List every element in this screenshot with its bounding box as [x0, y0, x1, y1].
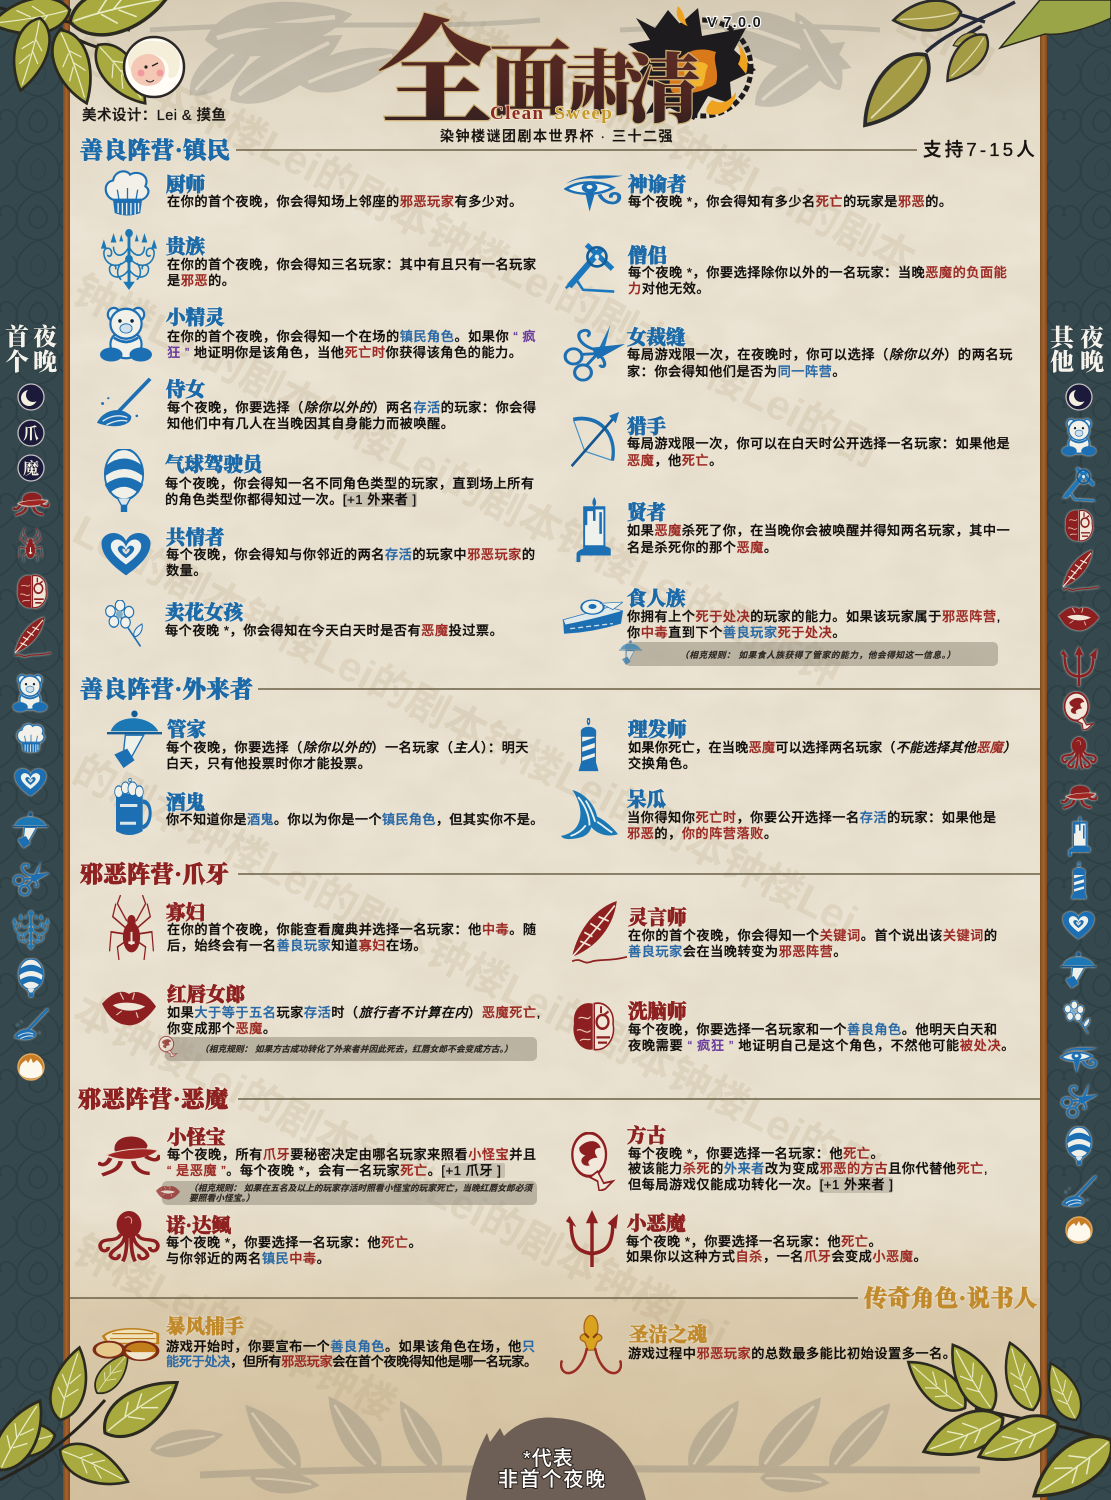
- title characters: 清: [625, 49, 701, 133]
- icon: sage: [1069, 816, 1090, 856]
- icon: seamstress: [14, 861, 50, 895]
- role: balloonist: 每个夜晚，你会得知一名不同角色类型的玩家，直到场上所有: [165, 475, 535, 491]
- section heading: townsfolk: 善良阵营·镇民: [80, 137, 230, 163]
- watermark: 的剧本钟楼Lei的剧本钟楼Lei的剧本钟楼Lei的剧: [66, 26, 886, 475]
- label: first night: 夜: [33, 323, 57, 351]
- label: other nights: 晚: [1080, 349, 1104, 376]
- label: first night: [5, 323, 57, 376]
- role: harpy: 灵言师: [628, 906, 687, 929]
- role: cannibal: 食人族: [627, 588, 686, 610]
- role: monk: 僧侣: [628, 244, 667, 267]
- icon: noble: [13, 911, 49, 950]
- emblem: thorned ring with flames: [628, 6, 756, 120]
- role: oracle: 神谕者: [628, 173, 687, 196]
- role: maid: 侍女: [166, 378, 207, 401]
- icon: monk: [1063, 468, 1095, 501]
- watermark: 钟楼Lei的剧本钟楼Lei的剧本钟楼Lei的剧本钟: [66, 266, 848, 696]
- role: drunk: 酒鬼: [166, 791, 206, 814]
- icon: oracle: [1061, 1048, 1098, 1073]
- credit text: 美术设计：Lei & 摸鱼: [82, 106, 226, 124]
- icon: imp: [1061, 646, 1097, 686]
- role: harpy: 善良玩家会在当晚转变为邪恶阵营。: [628, 943, 847, 959]
- panel: minions right column: [572, 901, 1015, 1053]
- role: recluse: [561, 789, 997, 841]
- role: spirit of ivory: 游戏过程中邪恶玩家的总数最多能比初始设置多一名。: [628, 1345, 956, 1361]
- icon: maid: [1062, 1176, 1096, 1207]
- role: storm catcher: [94, 1315, 537, 1369]
- section heading: legendary and storyteller: 传奇角色·说书人: [864, 1285, 1037, 1311]
- role: fang gu: 但每局游戏仅能成功转化一次。[+1 外来者 ]: [628, 1176, 893, 1192]
- other nights order strip: [1050, 324, 1104, 1243]
- role: drunk: [115, 778, 544, 835]
- label: first night: 首: [5, 324, 29, 351]
- role: scarlet woman: 你变成那个恶魔。: [167, 1020, 276, 1036]
- ghost foliage: bottom: [147, 1387, 980, 1497]
- footer note: *代表: [523, 1447, 574, 1470]
- panel: outsiders right column: [561, 718, 1016, 841]
- icon: butler: [13, 812, 48, 848]
- role: fang gu: 每个夜晚 *，你要选择一名玩家：他死亡。: [628, 1145, 884, 1161]
- role: barber: 如果你死亡，在当晚恶魔可以选择两名玩家（不能选择其他恶魔）: [628, 739, 1016, 755]
- icon: empath: [15, 769, 46, 796]
- role: lil monsta: [98, 1126, 537, 1178]
- icon: demon info: 魔: [23, 456, 39, 479]
- role: scarlet woman: 如果大于等于五名玩家存活时（旅行者不计算在内）恶魔死亡,: [167, 1004, 541, 1020]
- label: first night: 晚: [33, 349, 57, 376]
- role: empath: 共情者: [166, 526, 225, 549]
- role: noble: 贵族: [166, 235, 206, 258]
- icon: dusk: [1066, 384, 1092, 410]
- role: cannibal: 你拥有上个死于处决的玩家的能力。如果该玩家属于邪恶阵营,: [627, 608, 1001, 624]
- icon: widow: [19, 528, 42, 562]
- role: imp: 小恶魔: [627, 1212, 686, 1235]
- role: balloonist: 气球驾驶员: [165, 453, 265, 476]
- role: monk: 力对他无效。: [628, 280, 710, 296]
- leaves: bottom left: [0, 1343, 188, 1496]
- ghost foliage: top: [150, 0, 880, 121]
- player count: 支持7-15人: [923, 139, 1038, 160]
- role: lil monsta: “ 是恶魔 ”。每个夜晚 *，会有一名玩家死亡。[+1 爪牙 ]: [167, 1162, 501, 1178]
- role: widow: [110, 895, 537, 960]
- role: empath: 每个夜晚，你会得知与你邻近的两名存活的玩家中邪恶玩家的: [166, 546, 536, 562]
- role: cerenovus: 洗脑师: [628, 1000, 687, 1023]
- panel: minions left column: [102, 895, 541, 1061]
- role: spirit of ivory: [561, 1315, 956, 1373]
- role: empath: 数量。: [166, 563, 207, 578]
- icon: minion info: [18, 420, 44, 446]
- icon: maid: [14, 1009, 48, 1040]
- role: slayer: [572, 412, 1010, 468]
- role: barber: 理发师: [628, 719, 687, 741]
- role: lil monsta: 每个夜晚，所有爪牙要秘密决定由哪名玩家来照看小怪宝并且: [167, 1146, 537, 1162]
- role: recluse: 当你得知你死亡时，你要公开选择一名存活的玩家：如果他是: [627, 809, 997, 825]
- role: pixie: 狂 ” 地证明你是该角色，当他死亡时你获得该角色的能力。: [167, 344, 522, 360]
- icon: chef: [17, 724, 44, 752]
- role: noble: 在你的首个夜晚，你会得知三名玩家：其中有且只有一名玩家: [167, 256, 537, 272]
- watermark: 本钟楼Lei的剧本钟楼Lei的剧本钟楼Lei: [66, 986, 736, 1359]
- role: sage: 如果恶魔杀死了你，在当晚你会被唤醒并得知两名玩家，其中一: [627, 522, 1010, 538]
- icon: pixie: [1062, 419, 1096, 456]
- side panel: left: [0, 0, 70, 1500]
- jinx note: scarlet woman and fang gu: （相克规则： 如果方古成功转化了外来者并因此死去，红唇女郎不会变成方古。）: [200, 1044, 513, 1054]
- role: no dashii: 诺·达鲺: [166, 1214, 232, 1237]
- role: butler: 每个夜晚，你要选择（除你以外的）一名玩家（主人）：明天: [166, 739, 529, 755]
- role: seamstress: 女裁缝: [627, 326, 686, 349]
- icon: balloonist: [19, 959, 43, 997]
- label: other nights: 其: [1050, 325, 1078, 352]
- icon: fang gu: [1065, 693, 1093, 730]
- role: widow: 在你的首个夜晚，你能查看魔典并选择一名玩家：他中毒。随: [167, 921, 537, 937]
- title characters: 全: [377, 10, 494, 139]
- icon: cerenovus: [1066, 510, 1092, 541]
- role: storm catcher: 暴风捕手: [166, 1315, 245, 1338]
- icon: harpy: [1063, 550, 1099, 590]
- role: cannibal: 你中毒直到下个善良玩家死于处决。: [627, 624, 846, 640]
- leaves: top right: [850, 0, 1111, 138]
- title characters: [377, 10, 701, 139]
- icon: dawn: [18, 1054, 44, 1080]
- role: sage: 贤者: [627, 501, 666, 524]
- watermark: 的剧本钟楼Lei的剧本钟楼Lei的剧本钟楼Lei的剧: [66, 746, 886, 1195]
- title logo: [377, 6, 756, 139]
- version label: V 7.0.0: [707, 15, 762, 31]
- role: seamstress: [565, 325, 1013, 380]
- panel: townsfolk left column: [97, 171, 537, 646]
- role: pixie: [100, 306, 536, 362]
- footer note: [498, 1447, 607, 1491]
- leaves: top left: [0, 0, 172, 114]
- icon: balloonist: [1067, 1127, 1091, 1165]
- jinx note: lil monsta and scarlet woman: [156, 1181, 537, 1205]
- icon: dawn: [1066, 1217, 1092, 1243]
- icon: scarlet woman: [1059, 607, 1099, 630]
- role: monk: 每个夜晚 *，你要选择除你以外的一名玩家：当晚恶魔的负面能: [628, 264, 1007, 280]
- role: no dashii: [100, 1211, 422, 1266]
- role: barber: [579, 718, 1016, 771]
- role: imp: 如果你以这种方式自杀，一名爪牙会变成小恶魔。: [626, 1248, 927, 1264]
- jinx note: cannibal and butler: （相克规则： 如果食人族获得了管家的能力，他会得知这一信息。）: [680, 650, 956, 660]
- minion tag: [443, 1163, 505, 1178]
- section heading: outsiders: 善良阵营·外来者: [80, 676, 253, 702]
- role: maid: 每个夜晚，你要选择（除你以外的）两名存活的玩家：你会得: [167, 399, 537, 415]
- role: spirit of ivory: 圣洁之魂: [629, 1323, 708, 1346]
- panel: demons right column: [566, 1125, 988, 1267]
- role: storm catcher: 能死于处决，但所有邪恶玩家会在首个夜晚得知他是哪一名玩家。: [166, 1353, 537, 1369]
- outsider tag: [819, 1177, 893, 1193]
- icon: flower girl: [1064, 1001, 1089, 1034]
- icon: butler: [1061, 952, 1096, 988]
- role: harpy: 在你的首个夜晚，你会得知一个关键词。首个说出该关键词的: [628, 927, 998, 943]
- jinx note: cannibal and butler: [619, 640, 998, 666]
- label: other nights: [1050, 324, 1104, 376]
- role: chef: 厨师: [166, 173, 206, 196]
- role: slayer: 猎手: [627, 416, 666, 438]
- icon: barber: [1071, 862, 1087, 899]
- footer shape: [466, 1418, 646, 1500]
- role: balloonist: [105, 449, 535, 512]
- first night order strip: [5, 323, 57, 1080]
- role: cannibal: [563, 588, 1001, 640]
- leaves: bottom right: [898, 1336, 1111, 1500]
- role: noble: [101, 229, 537, 290]
- role: recluse: 呆瓜: [627, 789, 666, 811]
- panel: demons left column: [98, 1126, 537, 1266]
- section heading: demons: 邪恶阵营·恶魔: [78, 1086, 228, 1112]
- label: other nights: 夜: [1080, 324, 1104, 352]
- icon: empath: [1063, 912, 1094, 939]
- role: flower girl: [106, 600, 503, 646]
- role: no dashii: 与你邻近的两名镇民中毒。: [166, 1250, 330, 1266]
- jinx note: scarlet woman and fang gu: [159, 1036, 537, 1061]
- role: cerenovus: 每个夜晚，你要选择一名玩家和一个善良角色。他明天白天和: [628, 1021, 998, 1037]
- icon: dusk: [18, 384, 44, 410]
- role: fang gu: 被该能力杀死的外来者改为变成邪恶的方古且你代替他死亡,: [628, 1160, 988, 1176]
- role: balloonist: 的角色类型你都得知过一次。[+1 外来者 ]: [165, 491, 417, 507]
- side panel: right: [1040, 0, 1111, 1500]
- role: butler: [107, 710, 529, 771]
- role: pixie: 小精灵: [166, 306, 225, 329]
- role: harpy: [572, 901, 998, 963]
- role: no dashii: 每个夜晚 *，你要选择一名玩家：他死亡。: [166, 1234, 422, 1250]
- label: other nights: 他: [1050, 349, 1074, 376]
- watermark: 钟楼Lei的剧本钟楼: [66, 1226, 403, 1429]
- role: drunk: 你不知道你是酒鬼。你以为你是一个镇民角色，但其实你不是。: [166, 811, 544, 827]
- role: monk: [566, 244, 1007, 296]
- icon: no dashii: [1062, 737, 1096, 769]
- role: butler: 白天，只有他投票时你才能投票。: [166, 756, 371, 771]
- role: barber: 交换角色。: [628, 755, 696, 771]
- role: cerenovus: 夜晚需要 “ 疯狂 ” 地证明自己是这个角色，不然他可能被处决。: [628, 1037, 1015, 1053]
- role: slayer: 每局游戏限一次，你可以在白天时公开选择一名玩家：如果他是: [627, 435, 1010, 451]
- footer note: 非首个夜晚: [498, 1468, 607, 1491]
- role: imp: 每个夜晚 *，你要选择一名玩家：他死亡。: [626, 1233, 882, 1249]
- subtitle: 染钟楼谜团剧本世界杯 · 三十二强: [440, 128, 674, 144]
- title characters: 肃: [565, 47, 635, 124]
- panel: legendary: [94, 1315, 957, 1373]
- panel: outsiders left column: [107, 710, 544, 835]
- icon: lil monsta: [13, 493, 49, 515]
- role: oracle: [566, 173, 953, 212]
- panel: townsfolk right column: [563, 173, 1013, 666]
- role: flower girl: 每个夜晚 *，你会得知在今天白天时是否有恶魔投过票。: [165, 622, 503, 638]
- role: storm catcher: 游戏开始时，你要宣布一个善良角色。如果该角色在场，他只: [166, 1338, 536, 1354]
- label: first night: 个: [5, 349, 29, 376]
- role: widow: 寡妇: [166, 901, 205, 924]
- icon: harpy: [15, 617, 51, 657]
- role: seamstress: 每局游戏限一次，在夜晚时，你可以选择（除你以外）的两名玩: [627, 346, 1013, 362]
- icon: cerenovus: [18, 575, 46, 608]
- role: chef: 在你的首个夜晚，你会得知场上邻座的邪恶玩家有多少对。: [167, 193, 523, 209]
- role: noble: 是邪恶的。: [167, 273, 235, 288]
- role: seamstress: 家：你会得知他们是否为同一阵营。: [627, 363, 846, 379]
- icon: lil monsta: [1061, 786, 1097, 808]
- role: slayer: 恶魔，他死亡。: [627, 452, 723, 468]
- role: scarlet woman: 红唇女郎: [167, 983, 246, 1006]
- role: flower girl: 卖花女孩: [165, 601, 245, 624]
- jinx note: lil monsta and scarlet woman: （相克规则： 如果在五名及以上的玩家存活时照看小怪宝的玩家死亡，当晚红唇女郎必须: [189, 1183, 534, 1193]
- role: chef: [106, 171, 523, 216]
- role: maid: [97, 378, 537, 431]
- role: cerenovus: [573, 1000, 1015, 1053]
- role: sage: 名是杀死你的那个恶魔。: [627, 539, 778, 555]
- subtitle: english: Clean Sweep: [490, 103, 613, 124]
- role: empath: [102, 526, 536, 578]
- role: sage: [577, 497, 1010, 562]
- watermark: 钟楼Lei的剧本钟楼Lei的剧本: [419, 0, 923, 284]
- role: widow: 后，始终会有一名善良玩家知道寡妇在场。: [167, 937, 427, 953]
- icon: seamstress: [1062, 1083, 1098, 1117]
- jinx note: lil monsta and scarlet woman: 要照看小怪宝。）: [189, 1193, 255, 1203]
- role: lil monsta: 小怪宝: [167, 1126, 226, 1149]
- icon: minion info: 爪: [23, 421, 39, 444]
- role: scarlet woman: [102, 983, 541, 1036]
- role: oracle: 每个夜晚 *，你会得知有多少名死亡的玩家是邪恶的。: [628, 193, 953, 209]
- role: fang gu: [572, 1125, 988, 1193]
- role: pixie: 在你的首个夜晚，你会得知一个在场的镇民角色。如果你 “ 疯: [167, 328, 536, 344]
- section heading: minions: 邪恶阵营·爪牙: [80, 861, 229, 887]
- title characters: 面: [489, 35, 571, 126]
- role: recluse: 邪恶的，你的阵营落败。: [627, 825, 778, 841]
- role: imp: [566, 1210, 927, 1267]
- icon: demon info: [18, 455, 44, 481]
- avatar: designer: [124, 37, 184, 97]
- role: butler: 管家: [167, 718, 206, 741]
- outsider tag: [343, 492, 417, 507]
- icon: pixie: [13, 675, 47, 712]
- role: fang gu: 方古: [627, 1125, 666, 1147]
- role: maid: 知他们中有几人在当晚因其自身能力而被唤醒。: [167, 415, 454, 431]
- watermark: Lei的剧本钟楼Lei的剧本钟楼Lei的剧本钟楼Lei: [66, 506, 865, 944]
